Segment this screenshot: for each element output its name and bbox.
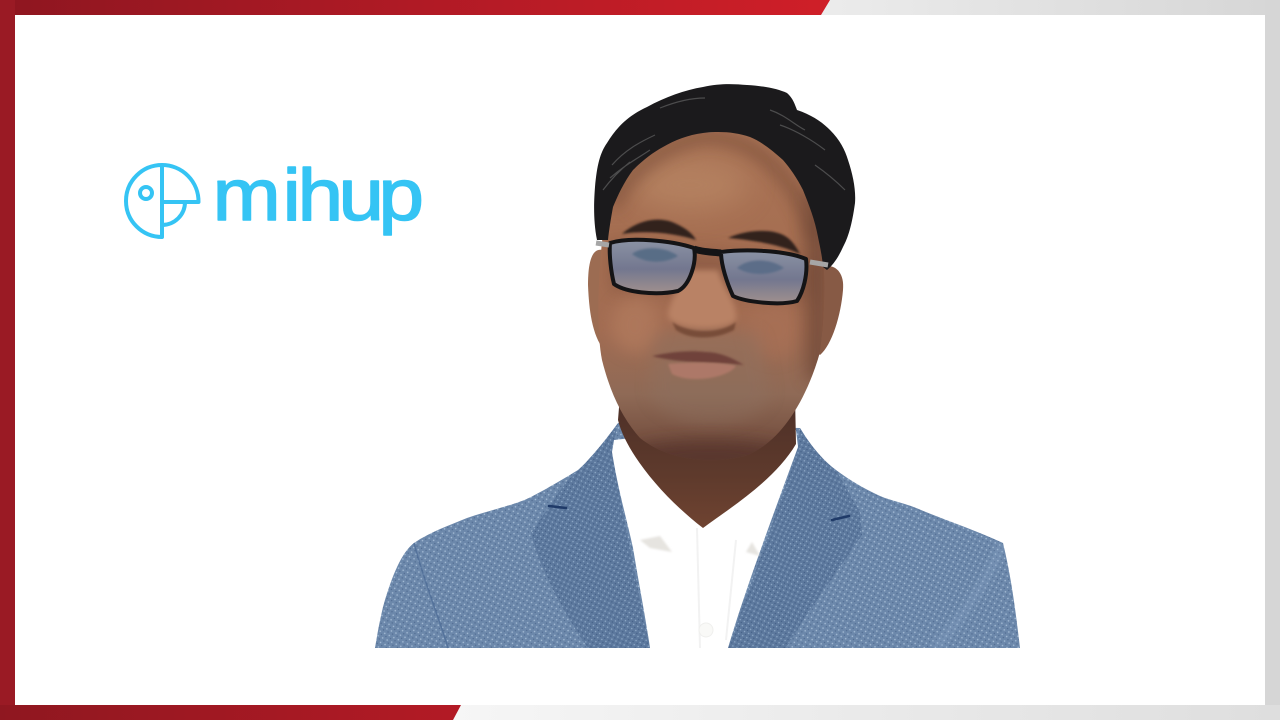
right ear	[810, 266, 843, 355]
logo wordmark: mihup	[213, 155, 424, 236]
shirt body	[612, 430, 798, 648]
face	[600, 132, 823, 449]
left eye	[632, 248, 678, 262]
nose shading	[668, 270, 736, 328]
frame: grey top bar	[815, 0, 1280, 15]
blazer body	[375, 423, 1020, 648]
temple arms	[596, 243, 828, 265]
right sleeve highlight	[935, 543, 1003, 648]
chin lower shadow	[646, 435, 770, 460]
stubble around mouth and chin	[684, 340, 728, 342]
hair grey highlights	[603, 98, 845, 190]
mihup logo	[126, 155, 424, 237]
eyebrow right	[728, 231, 800, 254]
face shading	[610, 137, 830, 472]
hair	[594, 84, 855, 270]
right lapel	[728, 428, 862, 648]
lapel buttonholes	[549, 506, 849, 520]
forehead highlight	[644, 164, 738, 208]
collar shade lines	[640, 536, 760, 556]
cheek tone right	[749, 302, 801, 358]
left sleeve seam shade	[414, 543, 448, 648]
eyebrow left	[622, 220, 696, 240]
right side shadow	[806, 190, 830, 380]
left lens	[610, 240, 695, 293]
left lapel	[531, 423, 650, 648]
right lens	[721, 250, 806, 303]
upper lip	[652, 351, 744, 365]
frame: red bottom bar	[0, 705, 461, 720]
frame: red top bar	[0, 0, 830, 15]
right eye	[737, 260, 784, 274]
placket shade	[697, 528, 736, 648]
neck	[618, 395, 796, 528]
nose	[668, 270, 736, 338]
frame: light bottom bar	[445, 705, 1280, 720]
frame outline	[610, 240, 806, 303]
cheek tone left	[616, 302, 654, 351]
portrait of man in blue blazer	[375, 84, 1020, 648]
shirt button	[699, 623, 713, 637]
nose tip shadow	[672, 322, 736, 338]
frame: red left bar	[0, 0, 15, 720]
frame: grey right bar	[1265, 0, 1280, 720]
face base	[598, 130, 824, 460]
glasses	[596, 240, 828, 303]
hairline shadow	[613, 137, 815, 240]
eye socket shadow	[607, 246, 810, 298]
blazer	[375, 423, 1020, 648]
left ear	[588, 250, 612, 350]
lower lip	[668, 363, 736, 379]
white shirt	[612, 430, 798, 648]
icon: parrot logo mark	[126, 165, 199, 237]
mouth	[652, 351, 744, 379]
